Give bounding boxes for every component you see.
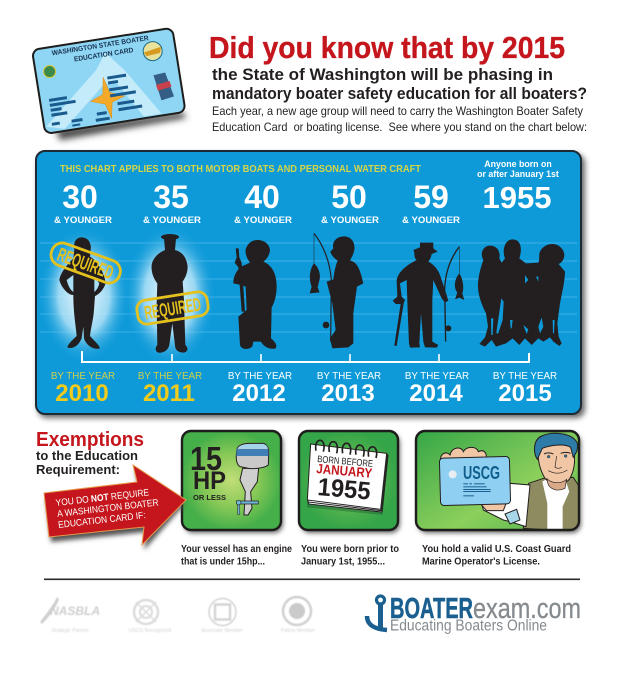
timeline bbox=[82, 351, 529, 362]
year numbers: 2010 bbox=[55, 380, 109, 407]
anyone born note bbox=[477, 159, 559, 179]
younger labels: & YOUNGER bbox=[143, 215, 201, 226]
required stamp 2010: REQUIRED bbox=[54, 245, 116, 284]
year numbers: 2013 bbox=[321, 380, 375, 407]
by the year labels bbox=[51, 371, 557, 382]
required stamp 2010 bbox=[48, 240, 123, 287]
panel: age chart bbox=[36, 151, 585, 418]
arrow callout: A WASHINGTON BOATER bbox=[57, 497, 159, 520]
exemption tile: 15 hp: 15 bbox=[190, 440, 222, 477]
year numbers bbox=[55, 380, 552, 407]
year numbers: 2014 bbox=[409, 380, 463, 407]
exemption tile: coast guard license bbox=[416, 431, 581, 533]
exemption tile: 15 hp bbox=[182, 431, 283, 533]
icon: tear-off calendar: 1955 bbox=[316, 473, 372, 506]
exemptions heading bbox=[36, 429, 144, 477]
boater education card illustration: EDUCATION CARD bbox=[74, 47, 134, 63]
partner logo: NASBLA: Strategic Partner bbox=[51, 628, 89, 634]
BOATERexam logo: Educating Boaters Online bbox=[390, 618, 547, 634]
by the year labels: BY THE YEAR bbox=[493, 371, 557, 382]
anyone born note: Anyone born on bbox=[484, 159, 552, 169]
silhouette: age 50 with rod bbox=[310, 233, 363, 348]
by the year labels: BY THE YEAR bbox=[51, 371, 115, 382]
silhouette: age 59 with rod and cane bbox=[393, 243, 464, 348]
age numbers: 50 bbox=[331, 179, 367, 215]
silhouette: age 35 bbox=[152, 234, 188, 353]
age numbers bbox=[62, 179, 551, 215]
by the year labels: BY THE YEAR bbox=[317, 371, 381, 382]
icon: tear-off calendar bbox=[307, 440, 388, 515]
partner logo: patron member bbox=[281, 597, 316, 634]
silhouette: age 40 bbox=[233, 240, 277, 349]
younger labels: & YOUNGER bbox=[402, 215, 460, 226]
caption: engine bbox=[181, 544, 292, 568]
required stamp 2011 bbox=[136, 291, 209, 325]
subtitle: the State of Washington will be phasing in bbox=[212, 66, 553, 84]
partner logo: USCG recognized: USCG Recognized bbox=[129, 628, 171, 634]
silhouette: age 30 bbox=[59, 237, 106, 349]
younger labels: & YOUNGER bbox=[234, 215, 292, 226]
year numbers: 2012 bbox=[232, 380, 286, 407]
exemption tile: 15 hp: HP bbox=[193, 467, 226, 495]
caption: license: You hold a valid U.S. Coast Guard bbox=[422, 544, 571, 555]
arrow callout: YOU DO NOT REQUIRE bbox=[55, 487, 150, 509]
arrow callout bbox=[44, 465, 186, 550]
chart note: THIS CHART APPLIES TO BOTH MOTOR BOATS AND PERSONAL WATER CRAFT bbox=[60, 163, 422, 175]
partner logo: associate member: Associate Member bbox=[201, 628, 243, 634]
age numbers: 59 bbox=[413, 179, 449, 215]
exemption tile: born before 1955 bbox=[299, 431, 400, 533]
subtitle: mandatory boater safety education for all boaters? bbox=[212, 85, 587, 103]
intro paragraph: Each year, a new age group will need to carry the Washington Boater Safety bbox=[212, 104, 583, 118]
exemptions heading: Exemptions bbox=[36, 429, 144, 451]
illustration: man holding card: USCG bbox=[463, 463, 500, 483]
younger labels bbox=[54, 215, 460, 226]
subtitle bbox=[212, 66, 587, 103]
illustration: man holding card bbox=[439, 433, 579, 532]
age numbers: 30 bbox=[62, 179, 98, 215]
partner logo: NASBLA: NASBLA bbox=[50, 604, 100, 618]
exemption tile: 15 hp: OR LESS bbox=[193, 493, 226, 502]
exemptions heading: to the Education bbox=[36, 448, 138, 463]
intro paragraph bbox=[212, 104, 587, 134]
by the year labels: BY THE YEAR bbox=[228, 371, 292, 382]
partner logo: NASBLA bbox=[40, 597, 100, 634]
caption: license: Marine Operator's License. bbox=[422, 556, 540, 568]
arrow callout: EDUCATION CARD IF: bbox=[58, 510, 146, 531]
partner logo: USCG recognized bbox=[129, 600, 171, 634]
younger labels: & YOUNGER bbox=[54, 215, 112, 226]
partner logo: associate member bbox=[201, 598, 243, 634]
boater education card illustration: WASHINGTON STATE BOATER bbox=[51, 35, 149, 57]
age numbers: 35 bbox=[153, 179, 189, 215]
year numbers: 2015 bbox=[498, 380, 552, 407]
glow behind required figures bbox=[38, 225, 216, 365]
BOATERexam logo: BOATER bbox=[390, 593, 473, 625]
BOATERexam logo bbox=[367, 593, 581, 634]
BOATERexam logo: exam.com bbox=[473, 593, 581, 625]
younger labels: & YOUNGER bbox=[321, 215, 379, 226]
partner logo: patron member: Patron Member bbox=[281, 628, 316, 634]
icon: anchor bbox=[367, 596, 387, 630]
icon: tear-off calendar: JANUARY bbox=[316, 461, 373, 481]
age numbers: 1955 bbox=[483, 180, 551, 215]
age numbers: 40 bbox=[244, 179, 280, 215]
icon: outboard motor bbox=[236, 443, 269, 515]
by the year labels: BY THE YEAR bbox=[405, 371, 469, 382]
silhouette: family group bbox=[478, 239, 565, 347]
required stamp 2011: REQUIRED bbox=[143, 295, 203, 324]
caption: engine: that is under 15hp... bbox=[181, 556, 265, 568]
caption: born prior: You were born prior to bbox=[301, 544, 399, 555]
caption: born prior: January 1st, 1955... bbox=[301, 556, 385, 568]
boater education card illustration bbox=[32, 28, 186, 140]
anyone born note: or after January 1st bbox=[477, 169, 559, 179]
caption: born prior bbox=[301, 544, 399, 568]
exemptions heading: Requirement: bbox=[36, 462, 120, 477]
intro paragraph: Education Card or boating license. See where you stand on the chart below: bbox=[212, 120, 587, 134]
icon: tear-off calendar: BORN BEFORE bbox=[317, 454, 373, 470]
caption: license bbox=[422, 544, 571, 568]
title: Did you know that by 2015 bbox=[209, 30, 565, 65]
year numbers: 2011 bbox=[143, 380, 195, 407]
caption: engine: Your vessel has an engine bbox=[181, 544, 292, 555]
by the year labels: BY THE YEAR bbox=[138, 371, 202, 382]
